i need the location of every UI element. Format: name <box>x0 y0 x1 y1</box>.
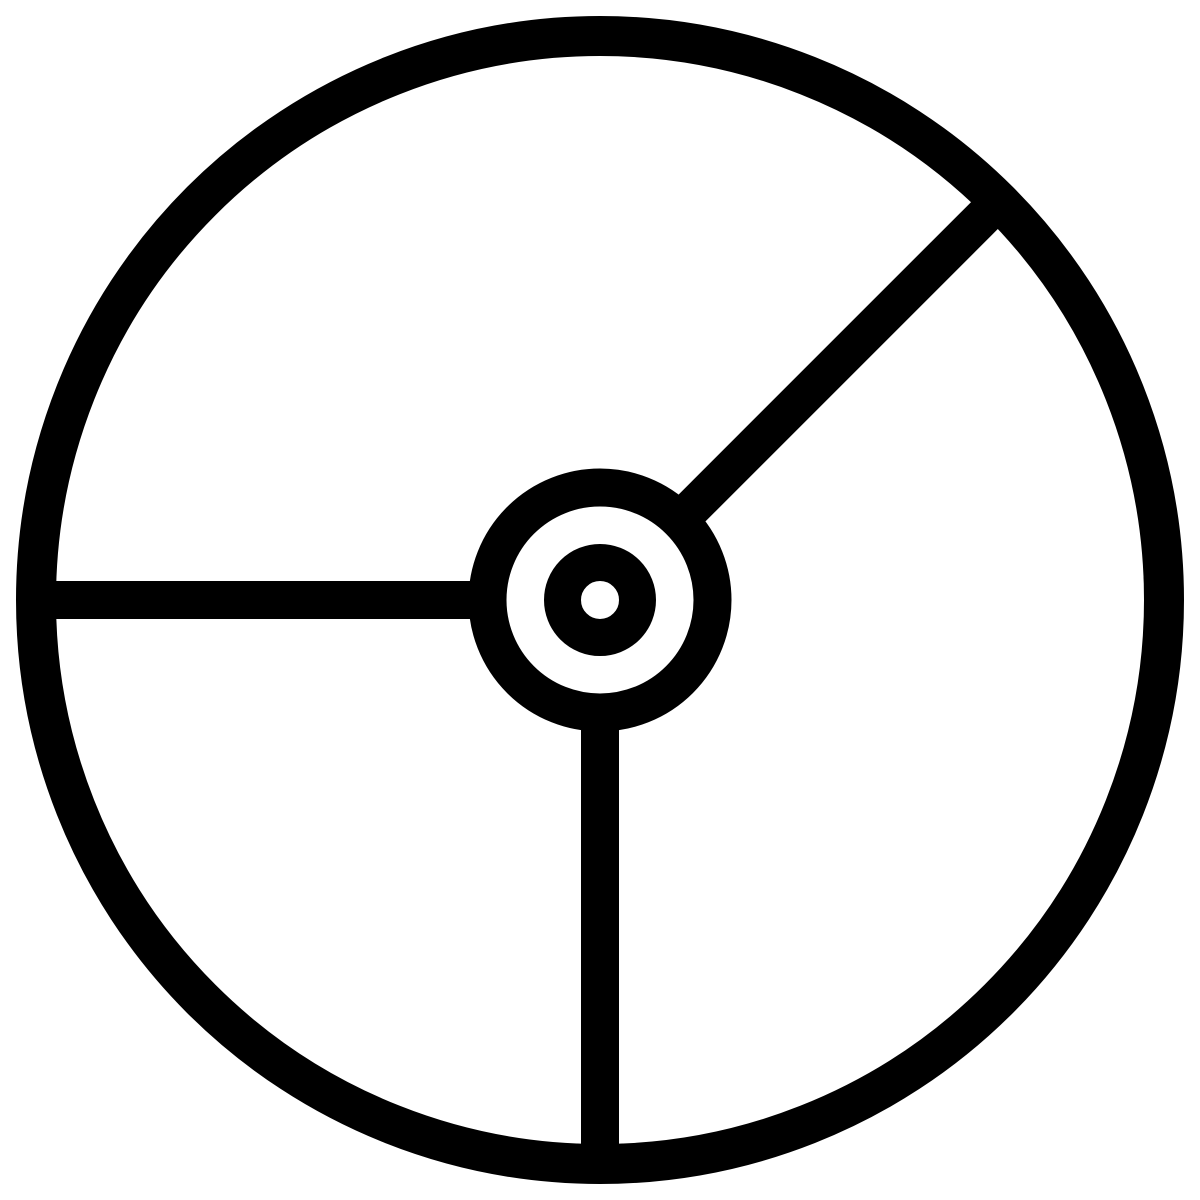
hub inner ring <box>562 562 638 638</box>
spoke: upper right <box>680 208 992 520</box>
spoke: left <box>36 581 486 619</box>
hub ring <box>488 488 712 712</box>
spoke: bottom <box>581 714 619 1164</box>
